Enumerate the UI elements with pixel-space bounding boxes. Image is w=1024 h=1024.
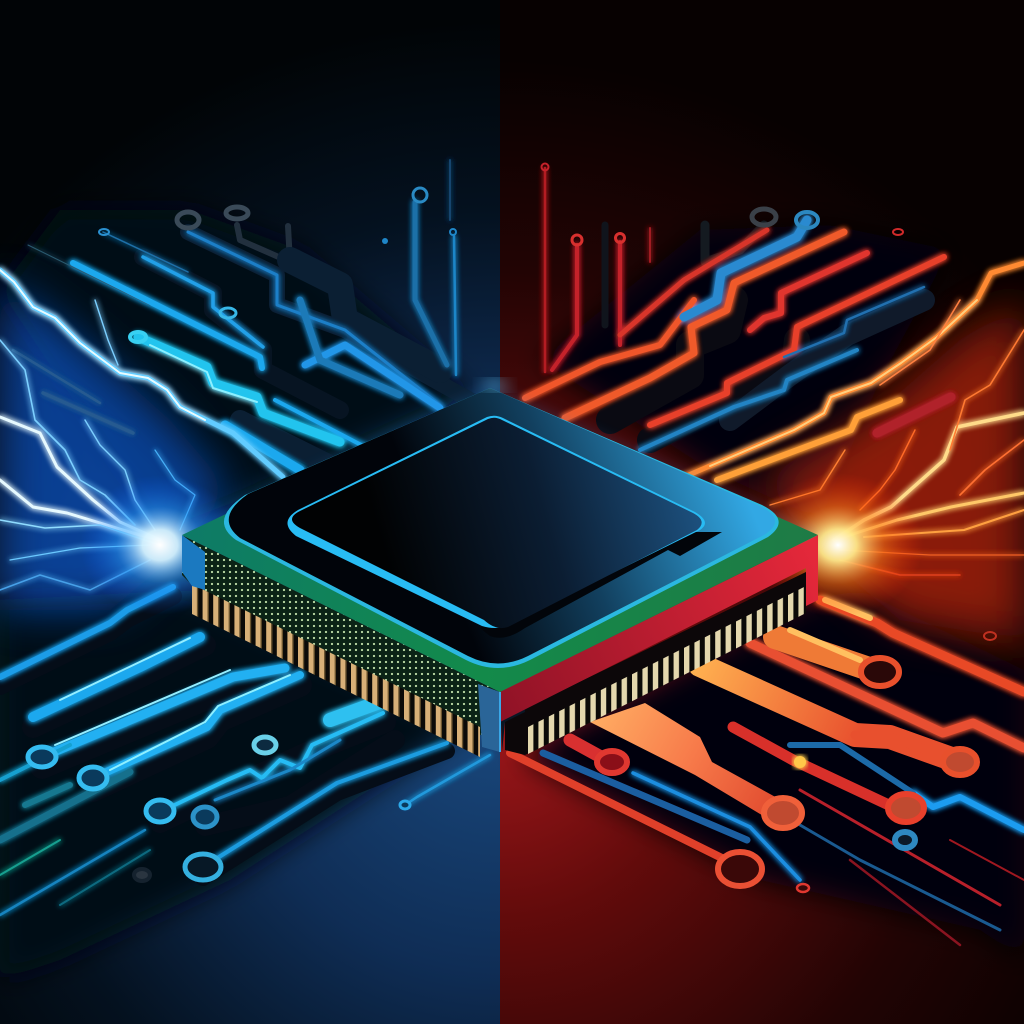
wide orange pad — [590, 703, 790, 820]
green substrate — [182, 388, 818, 692]
right wall — [500, 535, 818, 722]
left corner edge — [182, 535, 205, 590]
rings: upper left terminals — [99, 188, 456, 342]
lid cyan edge — [287, 416, 705, 628]
rings: lower left terminals — [28, 737, 410, 881]
gold pins: left — [192, 584, 480, 757]
heat spreader — [229, 388, 775, 664]
dark circuit board: upper left — [0, 210, 470, 530]
background: red right half — [500, 0, 1024, 1024]
background: blue left half — [0, 0, 500, 1024]
circuit traces: upper right red and orange — [525, 168, 951, 450]
lid shadow and notch — [480, 532, 722, 638]
dark circuit board: upper right — [540, 225, 950, 520]
CPU chip — [182, 388, 818, 757]
lid top — [292, 418, 702, 628]
centre glow at split — [481, 380, 509, 390]
cyan plate outline — [224, 388, 779, 668]
glow: left energy source — [80, 475, 240, 615]
dark circuit board: lower left — [0, 590, 470, 980]
circuit traces: lower left blue — [0, 587, 490, 915]
dark traces: upper left — [143, 225, 470, 465]
circuit traces: upper left blue — [13, 160, 456, 470]
glow: right energy source — [753, 473, 923, 617]
lightning: right — [684, 263, 1024, 575]
rings: upper right terminals — [542, 164, 903, 245]
energy haze: right — [760, 300, 1024, 640]
left wall with solder dots — [182, 535, 500, 745]
gold pins: right — [528, 586, 806, 754]
rings: lower right terminals — [597, 632, 996, 892]
circuit traces: lower right orange — [510, 600, 1024, 945]
lightning: left — [0, 270, 283, 590]
energy haze: left — [0, 280, 230, 610]
chip glow — [182, 388, 818, 692]
dark traces: upper right — [605, 225, 924, 440]
front corner — [478, 684, 500, 752]
dark circuit board: lower right — [520, 590, 1024, 960]
orange spot on trace — [794, 756, 806, 768]
right recess — [505, 572, 806, 755]
